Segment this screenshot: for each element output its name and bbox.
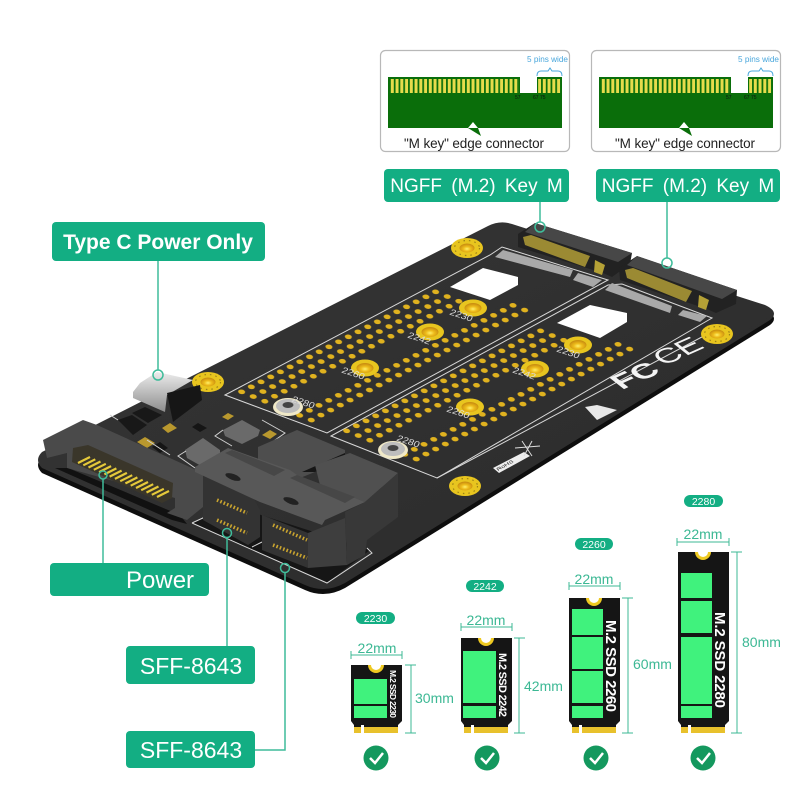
SSD 2280: 2280 <box>692 496 715 508</box>
card label: M.2 SSD 2260 <box>602 620 619 712</box>
FCC mark: FC <box>604 358 667 394</box>
SSD 2260: 60mm <box>633 656 672 672</box>
size pill <box>466 580 504 592</box>
callout: Power <box>50 471 209 596</box>
card frame <box>380 50 570 152</box>
check <box>584 746 608 770</box>
memory chips <box>681 573 712 718</box>
callout: SFF-8643 lower: SFF-8643 <box>140 737 242 763</box>
notch <box>368 665 384 673</box>
slot 1 dots, upper band <box>231 287 470 406</box>
notch <box>695 552 711 560</box>
PCB size markings: 2260 <box>445 405 472 421</box>
SATA gold pins <box>78 457 169 497</box>
contacts <box>681 727 725 733</box>
notch <box>478 638 494 646</box>
slot 1 dots, lower band <box>288 300 536 425</box>
caption: "M key" edge connector <box>404 136 544 151</box>
callout: Type C power only: Type C Power Only <box>63 231 253 254</box>
top latch plate <box>195 448 365 525</box>
SSD 2230: 30mm <box>415 690 454 706</box>
check <box>364 746 388 770</box>
PCB size markings: 2260 <box>340 366 367 382</box>
callout: Power: Power <box>126 567 194 594</box>
SSD 2280 <box>677 495 781 770</box>
green edge connector <box>388 77 562 136</box>
M.2 connector silkscreen strips <box>495 250 707 322</box>
SSD 2230: 2230 <box>364 613 387 625</box>
height dimension <box>731 552 742 733</box>
SSD 2280: 80mm <box>742 634 781 650</box>
SSD 2242: 42mm <box>524 678 563 694</box>
check <box>474 746 500 770</box>
5 pins wide note: 5 pins wide <box>738 55 779 64</box>
pin numbers: 57 <box>515 95 521 101</box>
board edge thickness <box>38 227 774 594</box>
card frame <box>592 50 780 152</box>
height dimension <box>405 665 416 733</box>
dark strip under SATA <box>55 468 187 524</box>
board top surface <box>38 222 774 589</box>
PCB size markings: 2230 <box>555 345 582 361</box>
pin numbers: 57 <box>726 95 732 101</box>
card body <box>678 552 729 729</box>
slot 2 dots, lower band <box>393 339 641 464</box>
rear housing <box>258 430 345 478</box>
memory chips <box>354 679 387 718</box>
callout: SFF-8643 upper <box>126 528 255 684</box>
size pill <box>575 538 613 550</box>
gold slot screw holes <box>351 300 592 416</box>
notch <box>586 598 602 606</box>
PCB size markings: 2230 <box>448 308 475 324</box>
callout: NGFF key M right <box>596 169 780 268</box>
gold pins <box>390 79 561 93</box>
callout: SFF-8643 upper: SFF-8643 <box>140 653 242 679</box>
5 pins wide note: 5 pins wide <box>527 55 568 64</box>
USB-C port <box>133 372 202 422</box>
dark area under SFF ports <box>192 505 370 583</box>
height dimension <box>514 638 525 733</box>
size pill <box>356 612 395 624</box>
memory chips <box>463 651 496 718</box>
height dimension <box>622 598 633 733</box>
PCB size markings: 2280 <box>395 434 422 450</box>
silkscreen outlines <box>192 247 715 583</box>
PCB size markings: 2280 <box>290 395 317 411</box>
contacts <box>464 727 508 733</box>
M key diagram 1 <box>380 50 570 152</box>
RoHS label <box>493 441 540 473</box>
bracket <box>748 68 773 76</box>
right port <box>262 515 308 568</box>
memory chips <box>572 609 603 718</box>
M.2 connector 2 <box>619 256 737 313</box>
width dimension: 22mm <box>575 571 613 587</box>
card body <box>461 638 512 729</box>
left port <box>203 475 260 545</box>
SFF-8643 gold pins <box>217 500 307 558</box>
callout: Type C power only <box>52 222 265 380</box>
PCB size markings: 2242 <box>511 366 537 382</box>
SSD 2242: 2242 <box>473 581 497 593</box>
card label: M.2 SSD 2242 <box>496 653 508 717</box>
white cut-out holes <box>450 268 518 300</box>
SATA power connector <box>43 420 203 520</box>
ESD warning symbol <box>585 405 617 420</box>
SSD 2260: 2260 <box>582 539 606 551</box>
PCB size markings <box>290 308 582 450</box>
PCB size markings: 2242 <box>406 331 432 347</box>
SSD 2230 <box>351 612 454 770</box>
green edge connector <box>599 77 773 136</box>
more pin numbers: 67 75 <box>744 95 757 101</box>
gold pins <box>601 79 772 93</box>
bracket <box>537 68 562 76</box>
card label: M.2 SSD 2230 <box>388 670 398 718</box>
more pin numbers: 67 75 <box>533 95 546 101</box>
SFF-8643 connector body <box>195 430 398 568</box>
SSD 2242 <box>461 580 563 770</box>
adapter board <box>38 222 774 594</box>
RoHS label: RoHS <box>496 460 515 472</box>
slot 2 dots, upper band <box>336 326 575 445</box>
callout: SFF-8643 lower <box>126 564 290 768</box>
silver standoffs <box>273 398 408 459</box>
callout: NGFF key M left <box>384 169 569 232</box>
CE mark: CE <box>646 333 711 370</box>
M.2 connector 1 <box>518 223 632 277</box>
caption: "M key" edge connector <box>615 136 756 151</box>
card body <box>351 665 402 729</box>
contacts <box>354 727 398 733</box>
M key diagram 2 <box>592 50 780 152</box>
size pill <box>684 495 723 507</box>
small electronic components <box>110 407 285 468</box>
corner mounting holes <box>192 238 733 496</box>
SSD 2260 <box>569 538 672 770</box>
width dimension: 22mm <box>467 612 505 628</box>
callout: NGFF key M left: NGFF (M.2) Key M <box>390 176 563 197</box>
card label: M.2 SSD 2280 <box>711 612 728 708</box>
contacts <box>572 727 616 733</box>
width dimension: 22mm <box>358 640 396 656</box>
callout: NGFF key M right: NGFF (M.2) Key M <box>602 176 774 197</box>
card body <box>569 598 620 729</box>
width dimension: 22mm <box>684 526 722 542</box>
check <box>690 746 716 770</box>
